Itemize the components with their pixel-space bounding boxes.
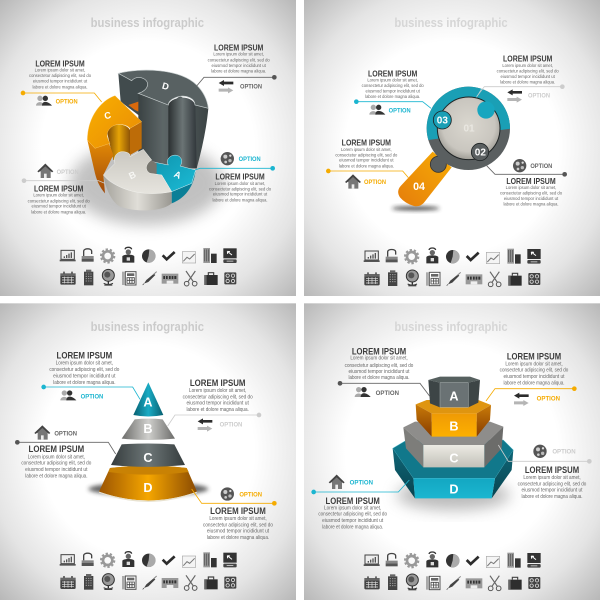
- magnifier chart: [392, 83, 513, 210]
- text block: Lorem ipsum dolor sit amet,: [35, 67, 85, 73]
- text block: Lorem ipsum dolor sit amet,: [505, 361, 563, 367]
- title: business infographic: [394, 319, 508, 334]
- text block: LOREM IPSUM: [210, 506, 266, 516]
- option label: OPTION: [239, 491, 262, 498]
- text block: consectetur adipiscing elit, sed do: [28, 198, 90, 204]
- text block: Lorem ipsum dolor sit amet,: [56, 361, 113, 367]
- text block: Lorem ipsum dolor sit amet,: [350, 356, 408, 362]
- panel background: [304, 303, 600, 600]
- text block: consectetur adipiscing elit, sed do: [500, 368, 568, 374]
- text block: eiusmod tempor incididunt ut: [31, 204, 86, 210]
- icon: people: [60, 390, 76, 400]
- letter B: B: [143, 422, 153, 436]
- text block: LOREM IPSUM: [56, 350, 112, 360]
- piece C: [87, 96, 142, 193]
- text block: eiusmod tempor incididunt ut: [322, 518, 384, 524]
- icon: arrows: [198, 418, 212, 432]
- text block: labore et dolore magna aliqua.: [365, 94, 420, 100]
- option label: OPTION: [56, 99, 78, 106]
- lens lower ring: [427, 87, 510, 170]
- icon: house: [37, 164, 53, 178]
- option label: OPTION: [389, 108, 411, 115]
- text block: LOREM IPSUM: [352, 347, 406, 357]
- text block: [335, 138, 398, 169]
- icon: globe: [513, 159, 526, 172]
- option label: OPTION: [530, 163, 553, 170]
- text block: Lorem ipsum dolor sit amet,: [189, 388, 247, 394]
- option label: OPTION: [81, 393, 104, 400]
- knob 03: 03: [437, 116, 448, 127]
- text block: consectetur adipiscing elit, sed do: [21, 461, 91, 467]
- text block: labore et dolore magna aliqua.: [186, 407, 249, 413]
- text block: eiusmod tempor incididunt ut: [186, 401, 249, 407]
- icon: people: [355, 387, 371, 397]
- callout A: [338, 347, 430, 397]
- text block: [345, 347, 413, 381]
- lens upper ring: [426, 86, 510, 140]
- text block: eiusmod tempor incididunt ut: [521, 488, 583, 494]
- ring seam: [476, 88, 482, 98]
- number 01: 01: [463, 124, 475, 135]
- text block: consectetur adipiscing elit, sed do: [49, 367, 119, 373]
- text block: consectetur adipiscing elit, sed do: [345, 363, 413, 369]
- hexagon stack chart: [393, 377, 513, 510]
- icon strip: [60, 552, 237, 590]
- piece D: [118, 70, 208, 168]
- text block: [209, 172, 271, 203]
- text block: eiusmod tempor incididunt ut: [500, 74, 555, 80]
- text block: LOREM IPSUM: [28, 444, 84, 454]
- text block: eiusmod tempor incididunt ut: [33, 79, 88, 85]
- icon: arrows: [514, 393, 529, 406]
- option label: OPTION: [239, 156, 261, 163]
- text block: Lorem ipsum dolor sit amet,: [367, 77, 418, 83]
- text block: eiusmod tempor incididunt ut: [211, 63, 266, 69]
- text block: Lorem ipsum dolor sit amet,: [502, 63, 553, 69]
- callout D: [192, 487, 277, 541]
- icon: arrows: [219, 80, 233, 93]
- panel: magnifier infographic: [304, 0, 600, 296]
- callout 02: [487, 159, 567, 208]
- callout top right: [477, 54, 565, 103]
- top knob: [477, 101, 495, 119]
- title: business infographic: [394, 15, 508, 30]
- title: business infographic: [91, 15, 204, 30]
- text block: labore et dolore magna aliqua.: [503, 380, 565, 386]
- lens centre piece 01: [437, 97, 500, 160]
- text block: labore et dolore magna aliqua.: [25, 474, 88, 480]
- callout C: [15, 425, 116, 480]
- text block: eiusmod tempor incididunt ut: [207, 529, 270, 535]
- text block: [49, 350, 119, 386]
- title: business infographic: [91, 319, 204, 334]
- icon: house: [345, 174, 361, 189]
- option label: OPTION: [537, 396, 560, 403]
- icon: globe: [221, 487, 234, 501]
- letter D: D: [143, 481, 153, 495]
- option label: OPTION: [350, 480, 373, 487]
- letter C: C: [449, 451, 459, 465]
- callout B: [168, 378, 261, 432]
- text block: eiusmod tempor incididunt ut: [339, 158, 394, 164]
- callout B: [22, 164, 105, 215]
- text block: consectetur adipiscing elit, sed do: [500, 191, 562, 197]
- text block: labore et dolore magna aliqua.: [211, 69, 266, 75]
- text block: labore et dolore magna aliqua.: [348, 375, 410, 381]
- text block: Lorem ipsum dolor sit amet,: [341, 147, 392, 153]
- callout C: [21, 58, 102, 106]
- text block: LOREM IPSUM: [190, 378, 245, 388]
- option label: OPTION: [220, 422, 243, 429]
- panel: hexagon stack infographic: [304, 303, 600, 600]
- text block: eiusmod tempor incididunt ut: [504, 196, 559, 202]
- text block: labore et dolore magna aliqua.: [322, 524, 383, 530]
- option label: OPTION: [54, 430, 77, 437]
- panel background: [0, 0, 296, 296]
- text block: LOREM IPSUM: [35, 58, 85, 68]
- text block: [29, 58, 91, 90]
- callout B: [486, 351, 577, 406]
- letter B: B: [127, 169, 138, 181]
- text block: labore et dolore magna aliqua.: [500, 80, 555, 86]
- text block: consectetur adipiscing elit, sed do: [183, 394, 253, 400]
- cone shadow: [88, 482, 208, 496]
- text block: LOREM IPSUM: [34, 184, 83, 194]
- panel background: [0, 303, 296, 600]
- icon: people: [369, 105, 385, 115]
- number 04: 04: [413, 181, 425, 193]
- option label: OPTION: [376, 390, 399, 397]
- text block: LOREM IPSUM: [368, 68, 417, 78]
- text block: eiusmod tempor incididunt ut: [348, 369, 410, 375]
- text block: labore et dolore magna aliqua.: [31, 209, 86, 215]
- letter C: C: [103, 110, 112, 121]
- text block: [21, 444, 91, 480]
- text block: Lorem ipsum dolor sit amet,: [213, 52, 264, 58]
- letter C: C: [143, 451, 153, 465]
- handle shadow: [392, 206, 440, 210]
- text block: Lorem ipsum dolor sit amet,: [523, 475, 581, 481]
- icon: arrows: [507, 89, 522, 103]
- text block: labore et dolore magna aliqua.: [521, 494, 583, 500]
- text block: Lorem ipsum dolor sit amet,: [33, 193, 84, 199]
- text block: labore et dolore magna aliqua.: [339, 163, 394, 169]
- text block: consectetur adipiscing elit, sed do: [208, 57, 270, 63]
- text block: Lorem ipsum dolor sit amet,: [506, 185, 556, 191]
- text block: consectetur adipiscing elit, sed do: [203, 522, 273, 528]
- text block: [28, 184, 90, 215]
- panel: puzzle cylinder infographic: [0, 0, 296, 296]
- text block: consectetur adipiscing elit, sed do: [497, 68, 559, 74]
- text block: eiusmod tempor incididunt ut: [213, 192, 268, 198]
- callout D: [311, 475, 409, 530]
- text block: LOREM IPSUM: [215, 172, 265, 182]
- callout 03: [354, 68, 431, 115]
- text block: eiusmod tempor incididunt ut: [53, 373, 116, 379]
- text block: LOREM IPSUM: [503, 54, 552, 64]
- text block: eiusmod tempor incididunt ut: [25, 467, 88, 473]
- letter A: A: [449, 390, 459, 404]
- stack shadow: [397, 480, 510, 510]
- text block: Lorem ipsum dolor sit amet,: [209, 516, 267, 522]
- text block: [500, 176, 562, 208]
- option label: OPTION: [57, 169, 79, 176]
- icon: globe: [533, 445, 547, 458]
- panel: cone infographic: [0, 303, 296, 600]
- callout A: [195, 152, 275, 203]
- text block: [203, 506, 273, 541]
- icon: house: [34, 425, 50, 440]
- text block: consectetur adipiscing elit, sed do: [209, 186, 271, 192]
- letter A: A: [172, 169, 183, 181]
- letter D: D: [449, 483, 459, 497]
- text block: labore et dolore magna aliqua.: [32, 84, 87, 90]
- text block: LOREM IPSUM: [342, 138, 391, 148]
- icon: people: [36, 96, 52, 106]
- callout D: [197, 43, 277, 93]
- text block: LOREM IPSUM: [507, 351, 561, 361]
- text block: [518, 465, 586, 500]
- icon strip: [364, 248, 541, 287]
- callout 04: [326, 138, 408, 189]
- text block: [183, 378, 253, 413]
- text block: eiusmod tempor incididunt ut: [503, 374, 565, 380]
- letter A: A: [143, 396, 153, 410]
- option label: OPTION: [364, 179, 386, 186]
- text block: labore et dolore magna aliqua.: [503, 202, 558, 208]
- text block: Lorem ipsum dolor sit amet,: [28, 454, 85, 460]
- option label: OPTION: [528, 93, 550, 100]
- panel background: [304, 0, 600, 296]
- option label: OPTION: [240, 83, 262, 90]
- knob 02: 02: [475, 148, 486, 159]
- option label: OPTION: [552, 449, 576, 456]
- icon: globe: [221, 152, 234, 165]
- callout C: [498, 445, 592, 500]
- text block: Lorem ipsum dolor sit amet,: [215, 181, 265, 187]
- letter D: D: [161, 81, 170, 92]
- drop shadow: [70, 142, 223, 225]
- text block: consectetur adipiscing elit, sed do: [362, 83, 424, 89]
- text block: consectetur adipiscing elit, sed do: [29, 73, 91, 79]
- text block: LOREM IPSUM: [525, 465, 579, 475]
- text block: [500, 351, 568, 386]
- text block: labore et dolore magna aliqua.: [207, 535, 270, 541]
- text block: [208, 43, 270, 75]
- icon strip: [364, 552, 541, 591]
- text block: consectetur adipiscing elit, sed do: [335, 152, 398, 158]
- text block: LOREM IPSUM: [506, 176, 556, 186]
- text block: labore et dolore magna aliqua.: [212, 197, 267, 203]
- callout A: [41, 350, 140, 400]
- text block: LOREM IPSUM: [325, 496, 380, 506]
- text block: labore et dolore magna aliqua.: [53, 380, 116, 386]
- text block: Lorem ipsum dolor sit amet,: [324, 505, 382, 511]
- text block: eiusmod tempor incididunt ut: [365, 89, 420, 95]
- text block: [318, 496, 387, 530]
- letter B: B: [449, 420, 459, 434]
- piece A: [150, 155, 196, 203]
- text block: consectetur adipiscing elit, sed do: [318, 512, 387, 518]
- piece B: [103, 149, 172, 210]
- icon: house: [329, 475, 345, 489]
- text block: [362, 68, 424, 100]
- cone chart: [88, 382, 208, 502]
- text block: LOREM IPSUM: [214, 43, 263, 53]
- icon strip: [60, 247, 237, 286]
- puzzle chart: [87, 70, 208, 210]
- text block: [497, 54, 559, 86]
